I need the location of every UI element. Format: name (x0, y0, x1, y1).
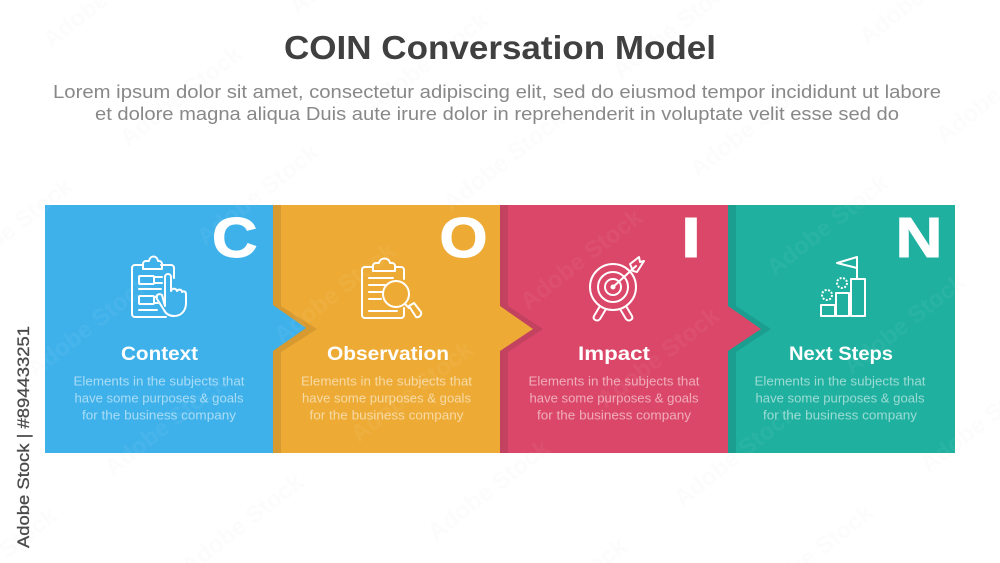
icon: target with arrow (590, 257, 644, 320)
text block: next steps: for the business company (763, 408, 918, 422)
text block: next steps: have some purposes & goals (756, 390, 925, 406)
text block: context: Elements in the subjects that (74, 374, 245, 388)
title: COIN Conversation Model (284, 29, 716, 66)
icon: clipboard with pointing hand (132, 256, 186, 317)
panel: next steps (728, 205, 955, 453)
letter O: O (440, 206, 488, 270)
panel: context (45, 205, 306, 453)
panel: impact (500, 205, 761, 453)
text block: next steps: Elements in the subjects that (754, 374, 926, 388)
icon: stairs with flag (821, 257, 865, 316)
text block: impact: have some purposes & goals (530, 390, 699, 406)
letter C: C (212, 206, 258, 270)
subtitle text block (53, 81, 941, 124)
heading: next steps: Next Steps (789, 344, 893, 365)
text block: observation: for the business company (310, 408, 464, 422)
text block: observation (301, 374, 472, 422)
text block: impact: Elements in the subjects that (528, 374, 700, 388)
text block: impact: for the business company (537, 408, 692, 422)
stock id side label: Adobe Stock | #894433251 (14, 326, 33, 548)
text block: context: for the business company (82, 408, 237, 422)
text block: observation: Elements in the subjects that (301, 374, 472, 388)
heading: context: Context (121, 344, 199, 365)
subtitle text block: Lorem ipsum dolor sit amet, consectetur adipiscing elit, sed do eiusmod tempor incididunt ut labore (53, 81, 941, 102)
text block: context (74, 374, 245, 422)
heading: observation: Observation (327, 344, 449, 365)
text block: context: have some purposes & goals (74, 390, 244, 406)
icon: clipboard with magnifier (362, 258, 421, 318)
text block: impact (528, 374, 700, 422)
text block: next steps (754, 374, 926, 422)
letter N: N (896, 206, 942, 270)
heading: impact: Impact (578, 344, 651, 365)
subtitle text block: et dolore magna aliqua Duis aute irure dolor in reprehenderit in voluptate velit esse sed do (95, 103, 899, 124)
panel: observation (273, 205, 533, 453)
text block: observation: have some purposes & goals (302, 390, 472, 406)
letter I: I (681, 206, 701, 270)
